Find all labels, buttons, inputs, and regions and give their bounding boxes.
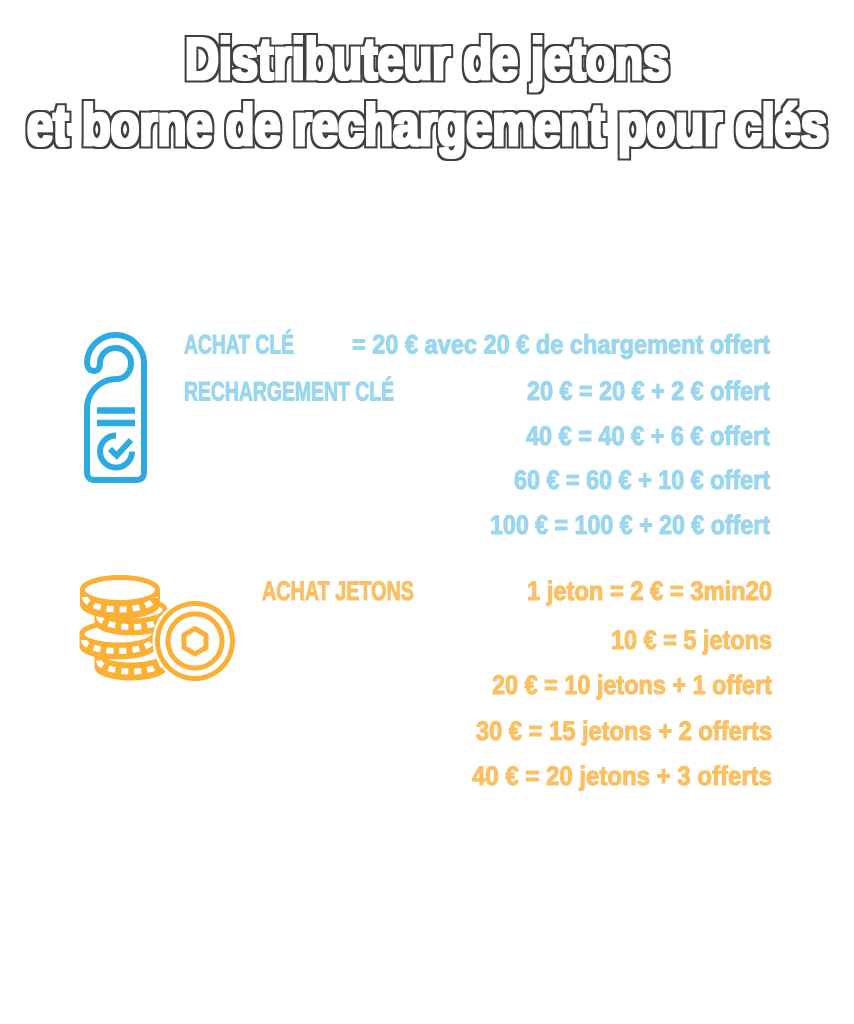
panel: token pricing text: 1 jeton = 2 € = 3min20 [527,576,772,606]
icon: door hanger key card [87,335,144,480]
panel: key pricing text: RECHARGEMENT CLÉ [184,376,394,406]
panel: key pricing text: 20 € = 20 € + 2 € offert [527,376,770,406]
panel: token pricing text: 20 € = 10 jetons + 1 offert [492,670,772,700]
panel: token pricing text: 30 € = 15 jetons + 2 offerts [476,716,772,746]
panel: key pricing text: 60 € = 60 € + 10 € offert [514,465,770,495]
panel: key pricing text: ACHAT CLÉ [184,328,294,360]
icon: coin stack [82,578,236,682]
title [27,27,827,158]
panel: key pricing text: = 20 € avec 20 € de chargement offert [352,330,770,360]
panel: token pricing text: ACHAT JETONS [262,576,414,606]
panel: token pricing text: 40 € = 20 jetons + 3 offerts [472,761,772,791]
panel: token pricing text: 10 € = 5 jetons [611,625,772,655]
title: Distributeur de jetons [185,27,669,92]
panel: key pricing text: 100 € = 100 € + 20 € offert [490,510,770,540]
panel: key pricing text [184,328,770,540]
panel: token pricing text [262,576,772,791]
panel: key pricing text: 40 € = 40 € + 6 € offert [526,421,770,451]
